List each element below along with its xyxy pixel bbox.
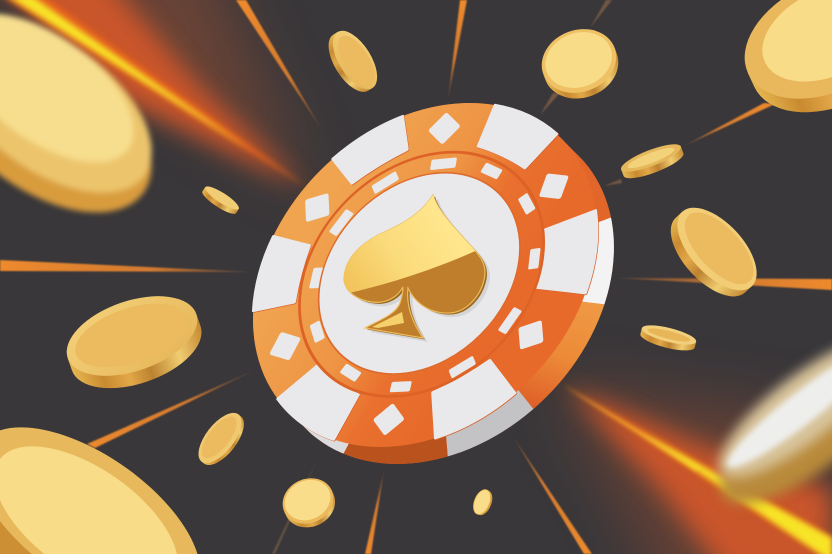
coin: left medium [66, 296, 202, 388]
ring dashes [309, 158, 540, 392]
centre white disc [318, 172, 520, 374]
chip top face [252, 32, 694, 462]
inner ring line [298, 150, 546, 398]
coin: bottom centre [282, 478, 335, 528]
coin: right tilted [670, 208, 757, 296]
coin: right small thin [640, 325, 696, 350]
coin: blurred foreground top left [0, 10, 156, 216]
coin: top right [744, 0, 832, 112]
coin: lower left small [198, 412, 244, 465]
coin: bottom tiny [473, 489, 492, 516]
coin: right thin [621, 144, 684, 178]
gold spade emblem [344, 195, 490, 342]
coin: upper middle [542, 29, 618, 98]
coin: blurred foreground bottom right [711, 342, 832, 509]
flare: lower right light streak [552, 368, 832, 554]
diamond markers [270, 113, 568, 435]
coin: top centre [328, 30, 378, 92]
coin: bottom left large [0, 427, 198, 554]
coin: small left of chip [202, 186, 239, 214]
chip side wall [253, 103, 614, 464]
flare: upper left light streak [0, 0, 310, 190]
white edge segments [252, 32, 694, 462]
poker chip [252, 103, 614, 464]
